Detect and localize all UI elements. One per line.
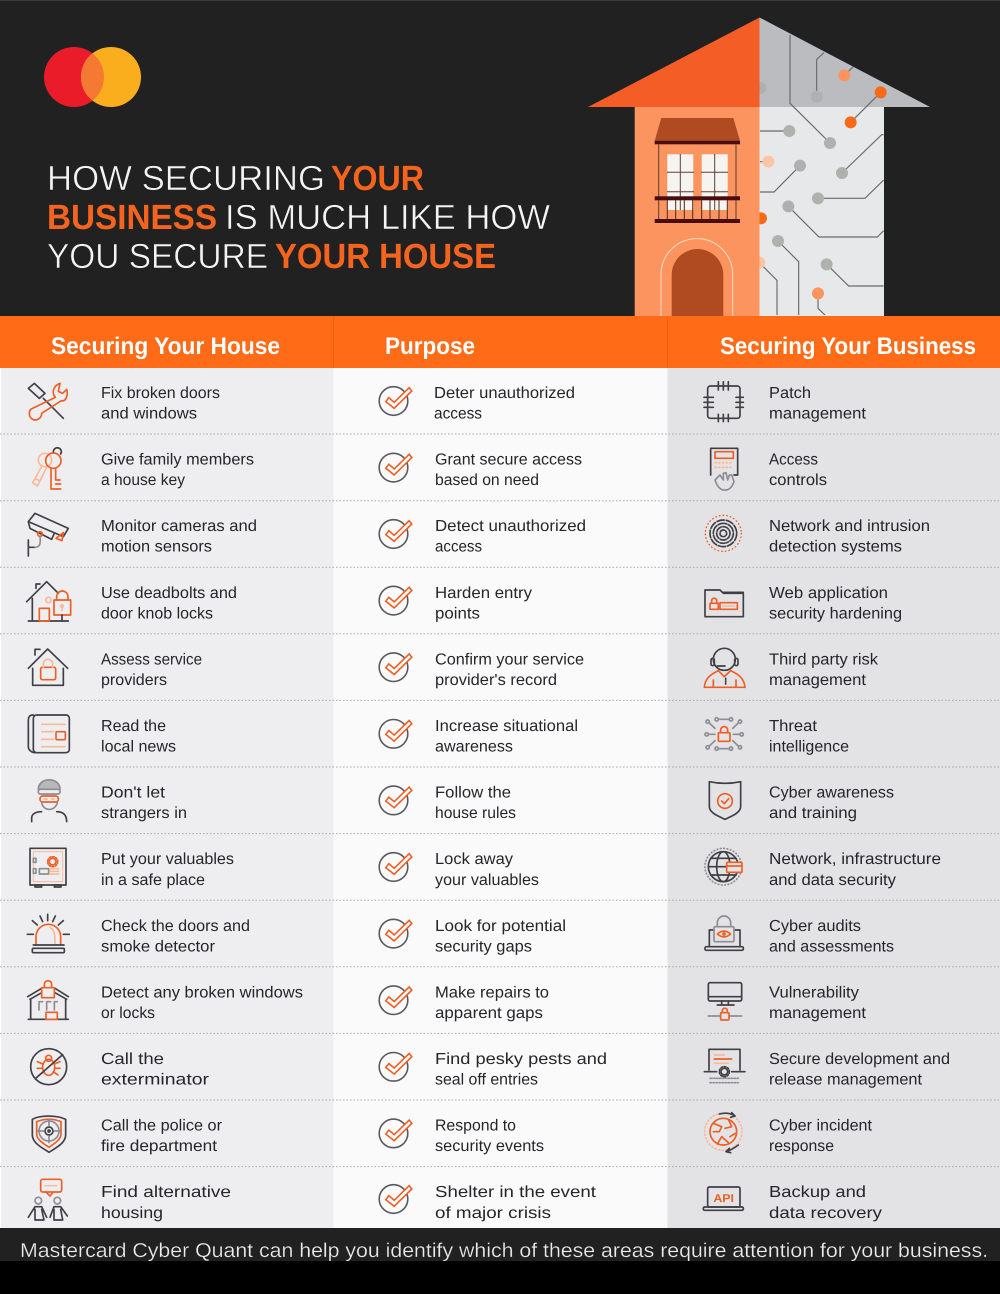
row text: Harden entry: [435, 585, 532, 602]
icon: people talking: [28, 1179, 67, 1220]
icon: chip: [704, 382, 743, 422]
balcony railing: [655, 196, 740, 223]
row text: [101, 1118, 223, 1155]
icon: laptop audit lock: [705, 916, 743, 950]
icon: laptop API: [703, 1187, 743, 1210]
row text: Call the: [101, 1051, 164, 1068]
row text: [769, 785, 894, 822]
row text: Cyber incident: [769, 1118, 873, 1135]
row text: [769, 1118, 873, 1155]
row text: [101, 1051, 210, 1089]
row text: Web application: [769, 585, 888, 602]
row text: and data security: [769, 872, 896, 889]
row text: Make repairs to: [435, 984, 549, 1001]
row text: management: [769, 672, 867, 689]
row text: Find pesky pests and: [435, 1051, 607, 1068]
row text: [435, 651, 584, 689]
row text: or locks: [101, 1005, 155, 1022]
icon: house with top lock: [28, 981, 68, 1019]
header background: [0, 0, 1000, 316]
row text: [101, 385, 220, 422]
row text: [101, 918, 250, 955]
icon: alarm light: [27, 914, 69, 953]
row text: [435, 984, 549, 1022]
row text: [101, 851, 234, 889]
icon: globe with card: [705, 848, 742, 885]
icon: security camera: [28, 513, 68, 556]
row text: release management: [769, 1072, 923, 1089]
row text: exterminator: [101, 1072, 210, 1089]
row text: [101, 1184, 231, 1222]
row text: management: [769, 1005, 867, 1022]
row text: [435, 1051, 607, 1089]
row text: Increase situational: [435, 718, 578, 735]
row text: Cyber audits: [769, 918, 861, 935]
icon: check: [379, 853, 412, 881]
roof left: [588, 18, 760, 107]
row text: a house key: [101, 472, 185, 489]
row text: [769, 585, 902, 622]
row text: Assess service: [101, 651, 202, 668]
row text: your valuables: [435, 872, 539, 889]
row text: local news: [101, 739, 176, 756]
row text: Secure development and: [769, 1051, 950, 1068]
row text: data recovery: [769, 1205, 882, 1222]
balcony canopy: [655, 118, 740, 144]
icon: check: [379, 720, 412, 748]
row text: Lock away: [435, 851, 513, 868]
title: HOW SECURING: [47, 159, 325, 198]
panel: column backgrounds: [1, 368, 1000, 1229]
windows: [659, 144, 736, 220]
row text: and training: [769, 805, 857, 822]
roof right: [760, 18, 930, 107]
icon: monitor with lock: [708, 983, 742, 1020]
icons: business column, rows 10-13: [703, 983, 745, 1210]
row text: Detect any broken windows: [101, 984, 303, 1001]
row text: [769, 1051, 950, 1089]
row text: response: [769, 1138, 834, 1155]
icon: check: [379, 520, 412, 548]
icon: fingerprint: [705, 515, 741, 551]
row text: Use deadbolts and: [101, 585, 237, 602]
row text: controls: [769, 472, 827, 489]
wall left: [635, 107, 760, 316]
panel: purpose text: [434, 385, 607, 1222]
row text: points: [435, 605, 480, 622]
row text: [434, 385, 575, 422]
row text: Check the doors and: [101, 918, 250, 935]
row text: [435, 1118, 544, 1155]
icon: check: [379, 919, 412, 948]
row text: [435, 918, 566, 955]
icon: check: [379, 1185, 412, 1213]
row text: Patch: [769, 385, 811, 402]
row text: based on need: [435, 472, 539, 489]
row text: Access: [769, 452, 818, 469]
icons: purpose checkmarks: [379, 387, 412, 1213]
row text: [101, 452, 254, 489]
row text: [769, 385, 867, 422]
icon: newspaper: [28, 715, 69, 753]
icon: check: [379, 1052, 412, 1081]
icon: keypad: [711, 448, 738, 490]
row text: [435, 718, 578, 756]
row text: Monitor cameras and: [101, 518, 257, 535]
row text: [101, 651, 202, 689]
row text: security events: [435, 1138, 544, 1155]
icon: check: [379, 786, 412, 815]
row text: management: [769, 406, 867, 422]
row text: [769, 1184, 882, 1222]
icon: laptop API: API: [713, 1192, 734, 1205]
title: YOUR: [331, 159, 424, 198]
panel: securing your business text: [769, 385, 950, 1222]
icon: check: [379, 387, 412, 415]
title: BUSINESS: [47, 198, 217, 237]
icon: incident globe: [705, 1113, 742, 1153]
row text: detection systems: [769, 539, 902, 556]
heading: Securing Your Business: Securing Your Business: [720, 333, 976, 360]
row text: strangers in: [101, 805, 187, 822]
row text: door knob locks: [101, 605, 213, 622]
icon: house with lock: [27, 582, 71, 621]
icon: house with padlock: [28, 649, 68, 685]
row text: Network and intrusion: [769, 518, 930, 535]
icon: check: [379, 653, 412, 682]
row text: Deter unauthorized: [434, 385, 575, 402]
title: [47, 159, 550, 276]
row text: Grant secure access: [435, 452, 582, 469]
panel: securing your house text: [101, 385, 303, 1222]
row text: [769, 452, 827, 489]
icons: business column, rows 1-4: [704, 382, 743, 617]
icon: no bugs: [31, 1049, 67, 1085]
icon: house key: [33, 448, 61, 489]
wall right: [760, 107, 884, 316]
row text: security gaps: [435, 938, 532, 955]
row text: Third party risk: [769, 651, 879, 668]
row text: access: [435, 539, 482, 556]
row text: Fix broken doors: [101, 385, 220, 402]
row text: seal off entries: [435, 1072, 538, 1089]
row text: of major crisis: [435, 1205, 551, 1222]
row text: Find alternative: [101, 1184, 231, 1201]
row text: [101, 518, 257, 556]
row text: and windows: [101, 406, 197, 422]
title: YOU SECURE: [47, 237, 268, 276]
row text: [101, 785, 187, 822]
row text: [769, 651, 879, 689]
row text: Don't let: [101, 785, 166, 802]
icons: business column, rows 5-9: [704, 648, 745, 950]
row text: provider's record: [435, 672, 557, 689]
icons: house column, rows 5-9: [27, 649, 69, 953]
row text: Put your valuables: [101, 851, 234, 868]
row text: Vulnerability: [769, 984, 859, 1001]
icon: threat intelligence lock: [705, 718, 743, 750]
bottom black strip: [0, 1261, 1000, 1294]
row text: apparent gaps: [435, 1005, 543, 1022]
icon: folder with lock: [705, 590, 743, 617]
title: IS MUCH LIKE HOW: [225, 198, 550, 237]
row text: in a safe place: [101, 872, 205, 889]
row text: Shelter in the event: [435, 1184, 597, 1201]
circuit pattern: [753, 35, 887, 315]
row text: [101, 984, 303, 1022]
row text: Network, infrastructure: [769, 851, 941, 868]
door: [661, 239, 733, 316]
row text: [435, 851, 539, 889]
row text: Follow the: [435, 785, 511, 802]
row text: [435, 785, 516, 822]
heading: Securing Your House: Securing Your House: [51, 333, 280, 360]
row text: [101, 585, 237, 622]
row text: [769, 918, 894, 955]
row text: Respond to: [435, 1118, 516, 1135]
row text: housing: [101, 1205, 163, 1222]
row text: [101, 718, 176, 756]
row text: providers: [101, 672, 167, 689]
row text: Backup and: [769, 1184, 866, 1201]
row text: fire department: [101, 1138, 218, 1155]
row text: Cyber awareness: [769, 785, 894, 802]
row text: security hardening: [769, 605, 902, 622]
row text: [769, 518, 930, 556]
row text: [769, 984, 867, 1022]
row text: Confirm your service: [435, 651, 584, 668]
row text: Look for potential: [435, 918, 566, 935]
row text: and assessments: [769, 938, 894, 955]
icon: shield with check: [709, 782, 741, 819]
row text: [435, 518, 586, 556]
row text: access: [434, 406, 482, 422]
icon: wrench and screwdriver: [28, 383, 67, 420]
icon: shield with target: [32, 1116, 66, 1152]
row text: Read the: [101, 718, 166, 735]
icons: house column, rows 1-4: [27, 383, 71, 621]
illustration: house: [588, 18, 930, 316]
row text: house rules: [435, 805, 516, 822]
footer text: Mastercard Cyber Quant can help you identify which of these areas require attention for your business.: [20, 1240, 988, 1262]
icon: secure development: [704, 1049, 745, 1083]
row text: [769, 851, 941, 889]
icon: check: [379, 986, 412, 1014]
row text: Threat: [769, 718, 818, 735]
footer band: [0, 1228, 1000, 1262]
icon: safe: [30, 848, 66, 887]
row text: Detect unauthorized: [435, 518, 586, 535]
logo: Mastercard circles: [44, 47, 141, 107]
icon: burglar: [32, 780, 67, 822]
row text: [435, 585, 532, 622]
icons: house column, rows 10-13: [28, 981, 68, 1220]
heading: Purpose: Purpose: [385, 333, 475, 360]
row text: [435, 1184, 597, 1222]
icon: check: [379, 1119, 412, 1148]
icon: support agent: [704, 648, 745, 687]
row text: [435, 452, 582, 489]
row text: [769, 718, 849, 756]
row text: Give family members: [101, 452, 254, 469]
icon: check: [379, 586, 412, 615]
row text: smoke detector: [101, 938, 216, 955]
row text: intelligence: [769, 739, 849, 756]
row text: Call the police or: [101, 1118, 223, 1135]
title: YOUR HOUSE: [275, 237, 496, 276]
row text: awareness: [435, 739, 513, 756]
row text: motion sensors: [101, 539, 212, 556]
icon: check: [379, 453, 412, 482]
header band: [0, 316, 1000, 368]
